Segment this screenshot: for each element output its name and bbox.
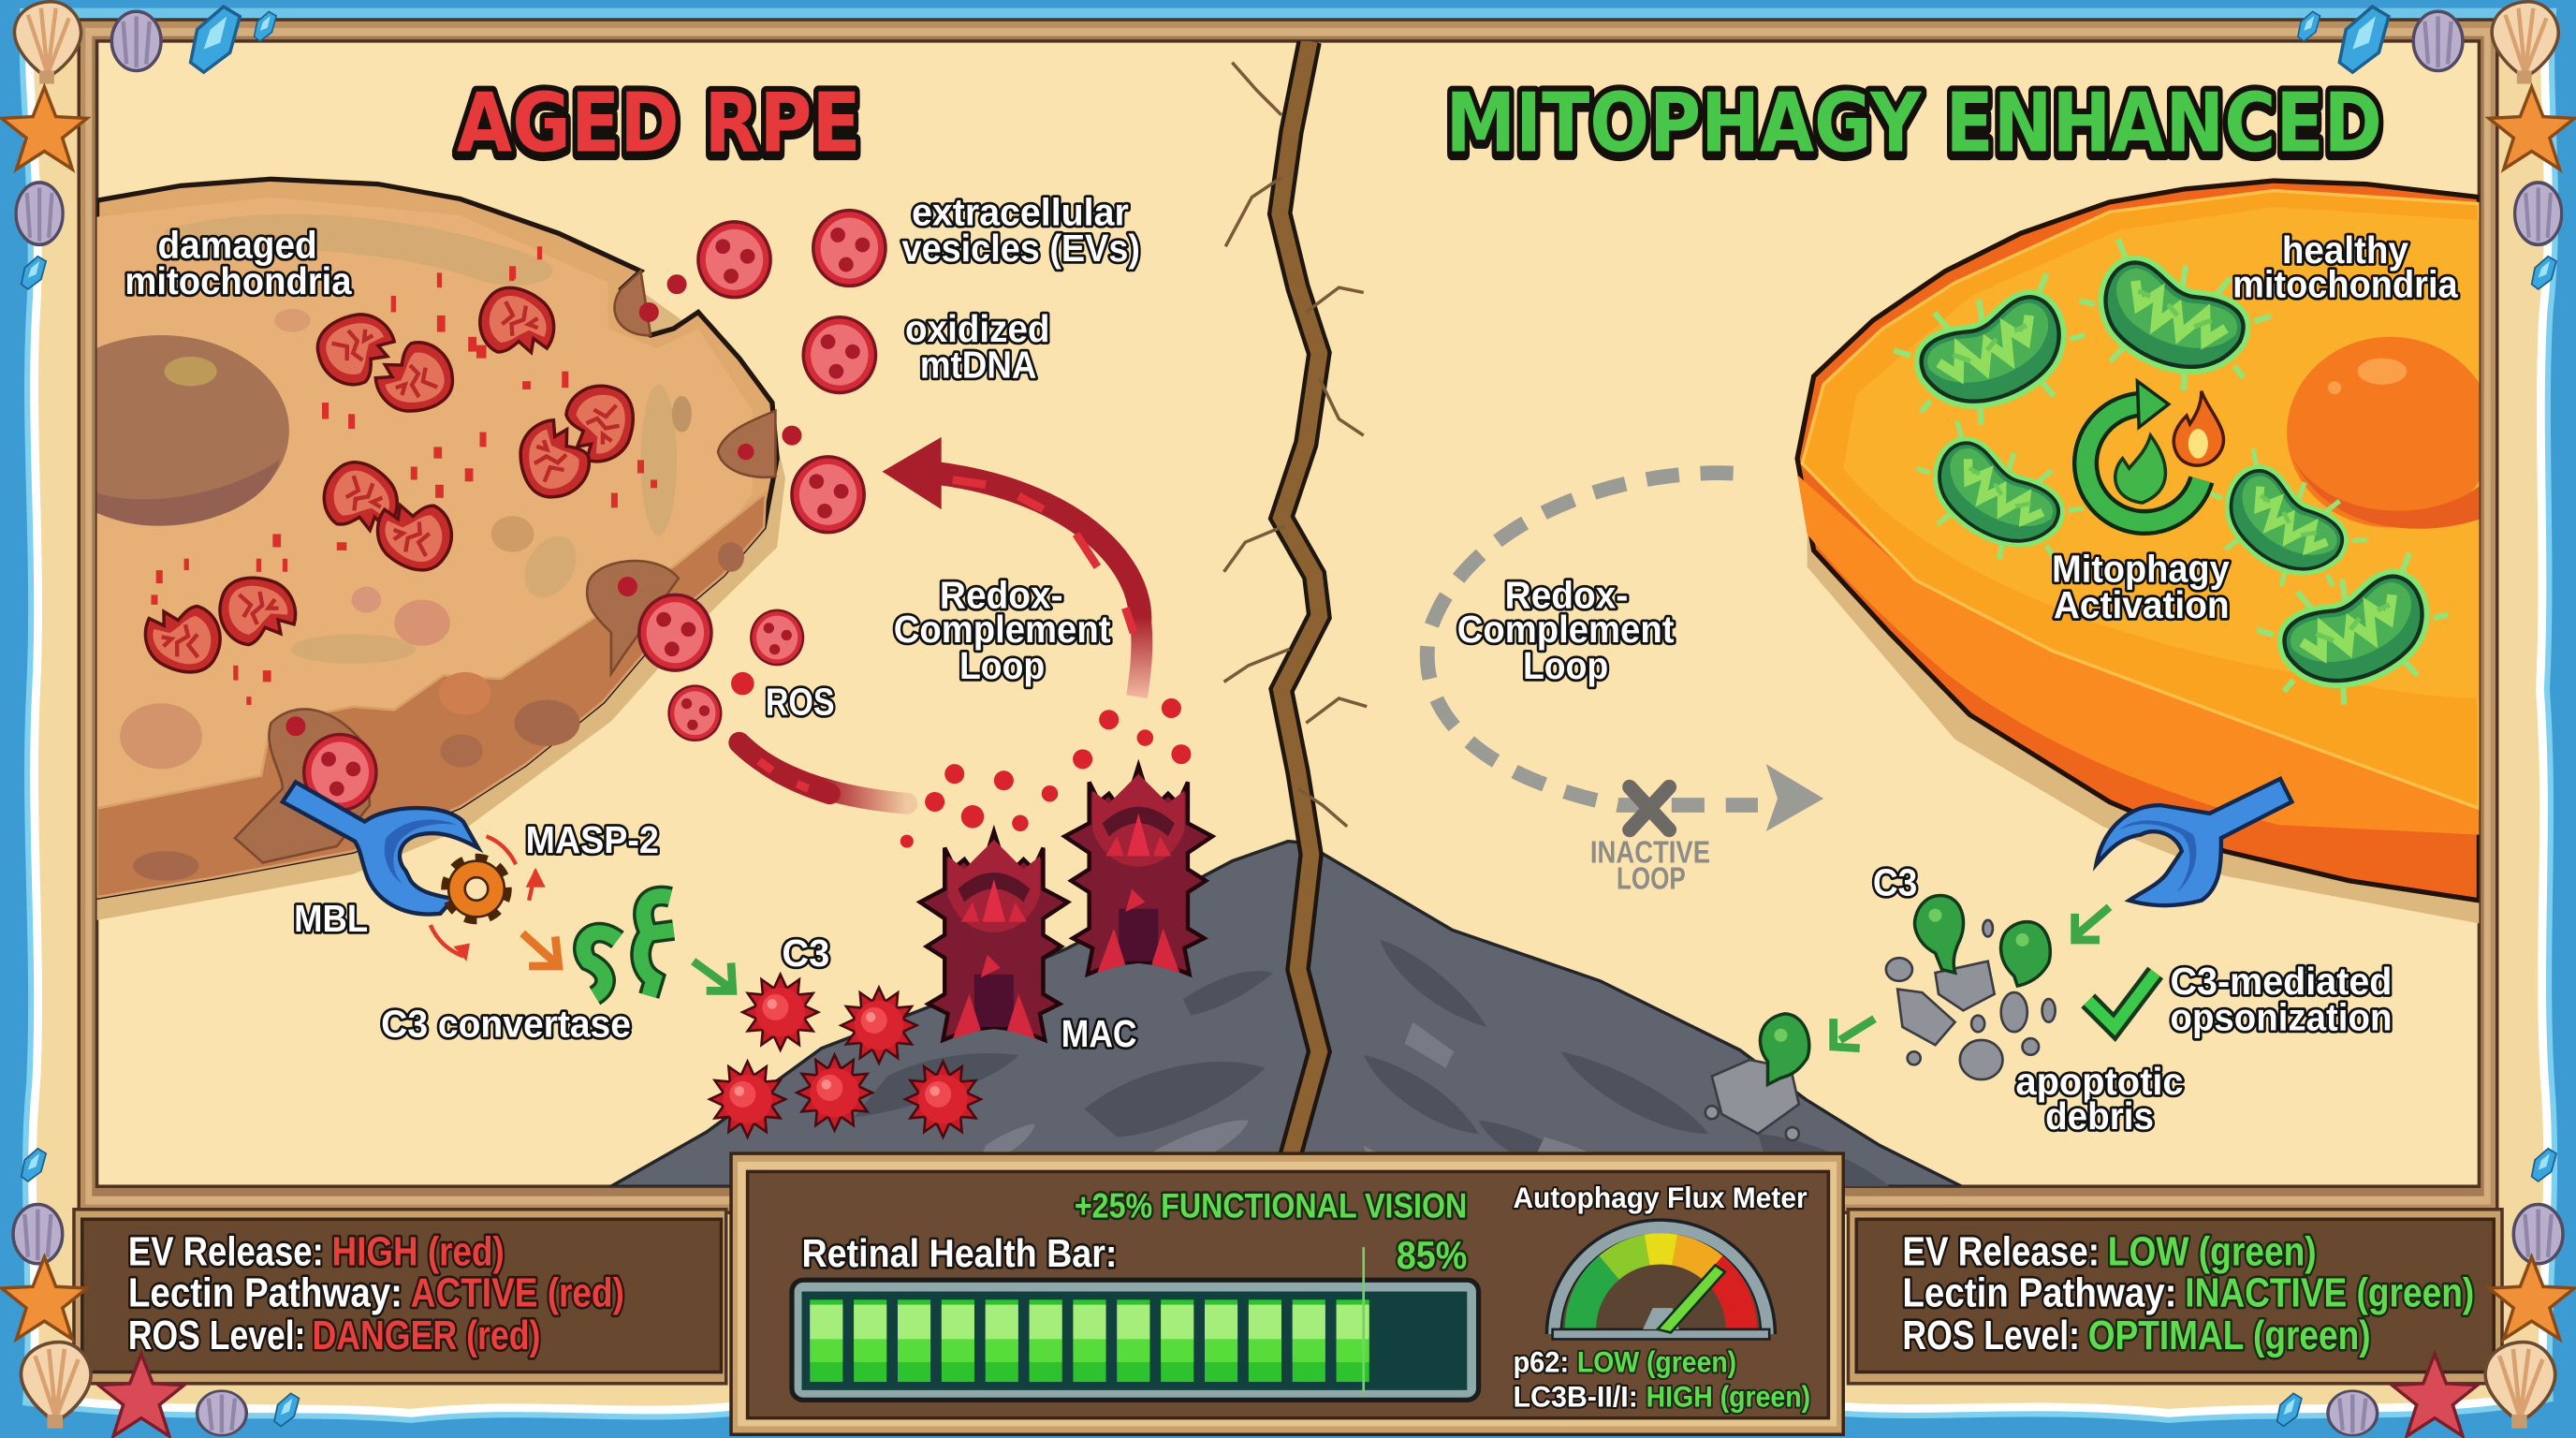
panel: left status — [74, 1210, 726, 1384]
extracellular vesicles — [302, 209, 887, 812]
title: aged RPE: AGED RPE — [457, 75, 861, 170]
title: mitophagy enhanced: MITOPHAGY ENHANCED — [1445, 75, 2382, 170]
bottom left shells — [2, 1149, 299, 1436]
central fissure crack — [1224, 41, 1367, 1158]
left side shells — [2, 87, 87, 289]
healthy mitochondrion 5 — [2256, 551, 2449, 704]
right wrench — [2097, 779, 2291, 905]
green arrow to debris — [1834, 1019, 1875, 1049]
label: right redox-complement loop: Redox- — [1505, 573, 1628, 616]
label: damaged mitochondria — [124, 224, 352, 302]
right status: EV release — [1902, 1228, 2317, 1274]
p62 reading: p62: — [1513, 1345, 1569, 1379]
label: inactive loop: LOOP — [1617, 862, 1686, 897]
lower darker band — [97, 493, 766, 897]
cell side mid band — [1797, 475, 2479, 835]
autophagy flux meter title: Autophagy Flux Meter — [1513, 1181, 1808, 1214]
label: extracellular vesicles: vesicles (EVs) — [902, 227, 1140, 270]
cell shadow — [1807, 534, 2479, 923]
label: healthy mitochondria: healthy — [2282, 228, 2408, 271]
label: extracellular vesicles: extracellular — [912, 190, 1129, 233]
MBL blue wrench — [283, 782, 478, 914]
green C3 balls — [1760, 896, 2050, 1084]
label: right redox-complement loop — [1457, 573, 1674, 687]
left status: EV release — [128, 1228, 505, 1274]
label: C3 right: C3 — [1873, 861, 1917, 904]
label: mitophagy activation: Mitophagy — [2052, 547, 2230, 590]
label: MAC: MAC — [1061, 1012, 1137, 1055]
LC3B reading: LC3B-II/I: — [1513, 1379, 1638, 1413]
flux gauge — [1553, 1227, 1769, 1339]
mountain rock — [611, 842, 1962, 1186]
apoptotic debris — [1705, 920, 2056, 1140]
bar segments — [810, 1299, 1369, 1382]
right healthy cell — [1797, 181, 2494, 923]
p62 reading — [1513, 1345, 1736, 1379]
cell shadow — [97, 294, 785, 920]
green arrow to C3 — [694, 961, 733, 990]
left status: ROS level: DANGER (red) — [312, 1313, 540, 1358]
inner bright area — [1843, 207, 2479, 698]
nucleus — [97, 335, 289, 526]
label: C3-mediated opsonization — [2170, 960, 2392, 1038]
inactive X mark — [1630, 787, 1669, 829]
top left shells — [14, 2, 276, 84]
label: C3-mediated opsonization: C3-mediated — [2170, 960, 2392, 1003]
top right shells — [2298, 2, 2558, 84]
vesicle buds — [235, 271, 775, 862]
mitophagy activation icon — [2086, 381, 2223, 522]
small red ROS dots — [285, 274, 1191, 848]
label: oxidized mtDNA: mtDNA — [920, 344, 1036, 387]
label: left redox-complement loop — [894, 573, 1110, 687]
right status: EV release: LOW (green) — [2108, 1228, 2317, 1274]
label: healthy mitochondria — [2232, 228, 2458, 306]
right status: lectin pathway: INACTIVE (green) — [2185, 1269, 2474, 1315]
wooden frame — [79, 20, 2497, 1212]
nucleus — [2287, 337, 2494, 529]
left status: lectin pathway: Lectin Pathway: — [128, 1269, 402, 1315]
label: right redox-complement loop: Complement — [1457, 608, 1674, 651]
label: mitophagy activation: Activation — [2054, 583, 2230, 626]
left status: ROS level — [128, 1313, 540, 1358]
inactive dashed loop — [1427, 473, 1823, 831]
label: inactive loop — [1590, 835, 1710, 897]
left status: ROS level: ROS Level: — [128, 1313, 305, 1358]
label: healthy mitochondria: mitochondria — [2232, 263, 2458, 306]
red debris specks — [151, 246, 657, 705]
damaged mitochondria cluster — [136, 276, 638, 682]
lower red tail arrow — [739, 742, 907, 803]
label: left redox-complement loop: Redox- — [940, 573, 1063, 616]
right status: lectin pathway: Lectin Pathway: — [1902, 1269, 2177, 1315]
cell interior — [97, 198, 753, 822]
right side shells — [2489, 87, 2574, 289]
LC3B reading — [1513, 1379, 1810, 1413]
label: MBL: MBL — [294, 897, 368, 940]
right status: ROS level: OPTIMAL (green) — [2088, 1313, 2371, 1358]
label: extracellular vesicles — [902, 190, 1140, 270]
left status: lectin pathway: ACTIVE (red) — [411, 1269, 624, 1315]
healthy mitochondrion 1 — [1893, 272, 2086, 425]
C3 convertase green shapes — [583, 896, 674, 996]
retinal health bar — [792, 1247, 1479, 1400]
left status: EV release: EV Release: — [128, 1228, 324, 1274]
label: apoptotic debris: debris — [2045, 1094, 2154, 1137]
label: C3-mediated opsonization: opsonization — [2170, 995, 2392, 1038]
retinal health bar label: Retinal Health Bar: — [801, 1231, 1117, 1275]
right status: ROS level — [1902, 1313, 2371, 1358]
panel: central health meter — [731, 1153, 1843, 1434]
label: ROS: ROS — [766, 680, 835, 723]
right status: ROS level: ROS Level: — [1902, 1313, 2080, 1358]
main scene panel — [97, 41, 2479, 1186]
C3 red spiky particles — [710, 975, 981, 1137]
label: mitophagy activation — [2052, 547, 2230, 626]
green check mark — [2088, 973, 2156, 1027]
MASP-2 orange gear — [431, 836, 546, 961]
green arrow from wrench — [2075, 907, 2110, 940]
health percent: 85% — [1397, 1233, 1467, 1277]
right status: EV release: EV Release: — [1902, 1228, 2100, 1274]
label: left redox-complement loop: Loop — [959, 644, 1045, 687]
pale greenish patches — [165, 214, 677, 664]
functional vision gain: +25% FUNCTIONAL VISION — [1075, 1187, 1467, 1225]
label: right redox-complement loop: Loop — [1523, 644, 1608, 687]
loop arrow: active red — [882, 437, 1142, 697]
label: C3 left: C3 — [782, 932, 829, 975]
panel: right status — [1848, 1210, 2502, 1384]
left status: lectin pathway — [128, 1269, 624, 1315]
cell blotches — [120, 309, 744, 881]
left aged RPE cell — [33, 179, 785, 920]
LC3B reading: HIGH (green) — [1647, 1379, 1810, 1413]
label: left redox-complement loop: Complement — [894, 608, 1110, 651]
healthy mitochondrion 2 — [2079, 238, 2272, 391]
label: C3 convertase: C3 convertase — [381, 1002, 631, 1045]
p62 reading: LOW (green) — [1577, 1345, 1736, 1379]
label: MASP-2: MASP-2 — [526, 818, 659, 861]
orange arrow — [522, 933, 559, 966]
label: damaged mitochondria: mitochondria — [124, 259, 352, 302]
label: oxidized mtDNA — [905, 307, 1050, 387]
cell top surface — [1802, 191, 2479, 809]
MAC pore towers — [920, 766, 1212, 1040]
healthy mitochondrion 4 — [2209, 448, 2367, 587]
label: damaged mitochondria: damaged — [157, 224, 317, 267]
cell rim — [1797, 181, 2479, 901]
label: oxidized mtDNA: oxidized — [905, 307, 1050, 350]
label: apoptotic debris: apoptotic — [2016, 1060, 2184, 1103]
left status: EV release: HIGH (red) — [332, 1228, 505, 1274]
bottom right shells — [2277, 1149, 2574, 1436]
label: inactive loop: INACTIVE — [1590, 835, 1710, 870]
label: apoptotic debris — [2016, 1060, 2184, 1137]
right status: lectin pathway — [1902, 1269, 2474, 1315]
cell body — [97, 179, 777, 897]
healthy mitochondrion 3 — [1916, 419, 2085, 560]
